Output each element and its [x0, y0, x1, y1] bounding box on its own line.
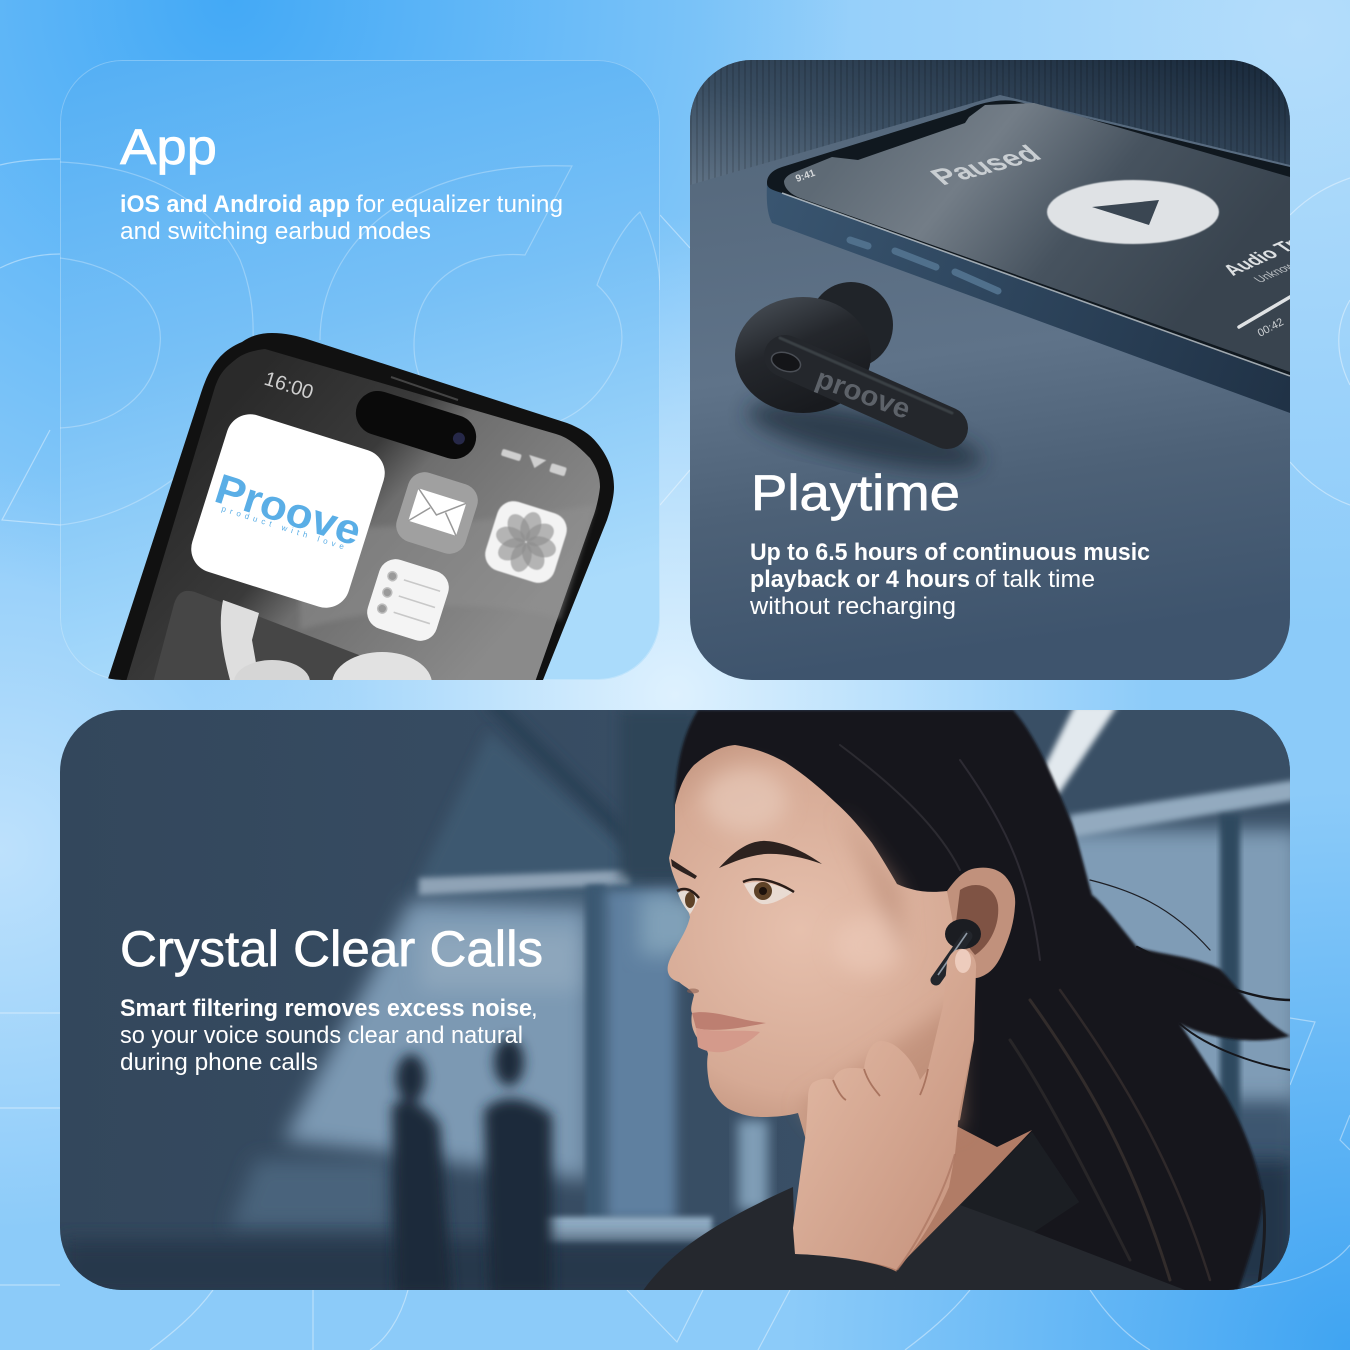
audio track label: Unknown: [1250, 258, 1305, 285]
elapsed time: 00:42: [1256, 316, 1286, 340]
panel: crystal clear calls: [60, 700, 1300, 1300]
earbud in ear: [936, 919, 981, 980]
skin highlights: [703, 768, 960, 1130]
clock: 16:00: [262, 368, 316, 404]
status icons: [500, 447, 567, 477]
hand and finger: [793, 949, 976, 1270]
neck: [850, 1120, 1032, 1272]
playtime description: playback or 4 hours: [750, 566, 970, 593]
app description: for equalizer tuning: [356, 191, 563, 218]
ear: [947, 868, 1015, 978]
earbud: [735, 282, 987, 484]
heading: playtime: Playtime: [751, 465, 960, 521]
playtime description: [749, 539, 1150, 620]
playtime description: Up to 6.5 hours of continuous music: [750, 539, 1150, 566]
calls description: during phone calls: [120, 1049, 318, 1076]
earbud: proove: [812, 362, 915, 425]
mail icon: [396, 472, 478, 554]
jacket: [640, 1132, 1198, 1295]
heading: app: App: [120, 119, 217, 175]
heading: calls: Crystal Clear Calls: [120, 921, 543, 977]
status time: 9:41: [794, 168, 817, 185]
reminders icon: [367, 559, 449, 641]
calls description: [120, 995, 538, 1076]
proove logo card: Proove: [210, 465, 367, 555]
app description: iOS and Android app: [120, 191, 350, 218]
playtime description: of talk time: [975, 566, 1095, 593]
eyebrows, eyes, nose and lips: [671, 841, 822, 1052]
hair: [675, 710, 1290, 1295]
phone on table: [767, 100, 1305, 413]
calls description: Smart filtering removes excess noise: [120, 995, 532, 1022]
blurred people: [392, 1038, 552, 1295]
phone notch: [356, 391, 476, 459]
blurred office background: [60, 700, 1300, 1300]
panel: app: [60, 60, 660, 716]
proove logo card: product with love: [220, 504, 346, 551]
photos icon: [484, 500, 568, 584]
audio track label: Audio Tr: [1218, 236, 1304, 279]
progress slider: [1239, 297, 1290, 327]
woman with earbud: [640, 710, 1290, 1295]
face: [668, 745, 975, 1140]
audio track label: [1226, 240, 1290, 282]
paused label: Paused: [923, 140, 1048, 190]
app description: and switching earbud modes: [120, 218, 431, 245]
proove logo card: [191, 414, 385, 608]
wall: [690, 60, 1290, 185]
app description: [120, 191, 563, 245]
panel: playtime: [690, 60, 1305, 680]
phone with app icons: [106, 333, 614, 716]
calls description: so your voice sounds clear and natural: [120, 1022, 523, 1049]
right side office: [1228, 710, 1290, 772]
headphones widget: [154, 591, 432, 680]
calls description: ,: [531, 995, 538, 1022]
playtime description: without recharging: [749, 593, 956, 620]
play button: [1047, 180, 1219, 244]
